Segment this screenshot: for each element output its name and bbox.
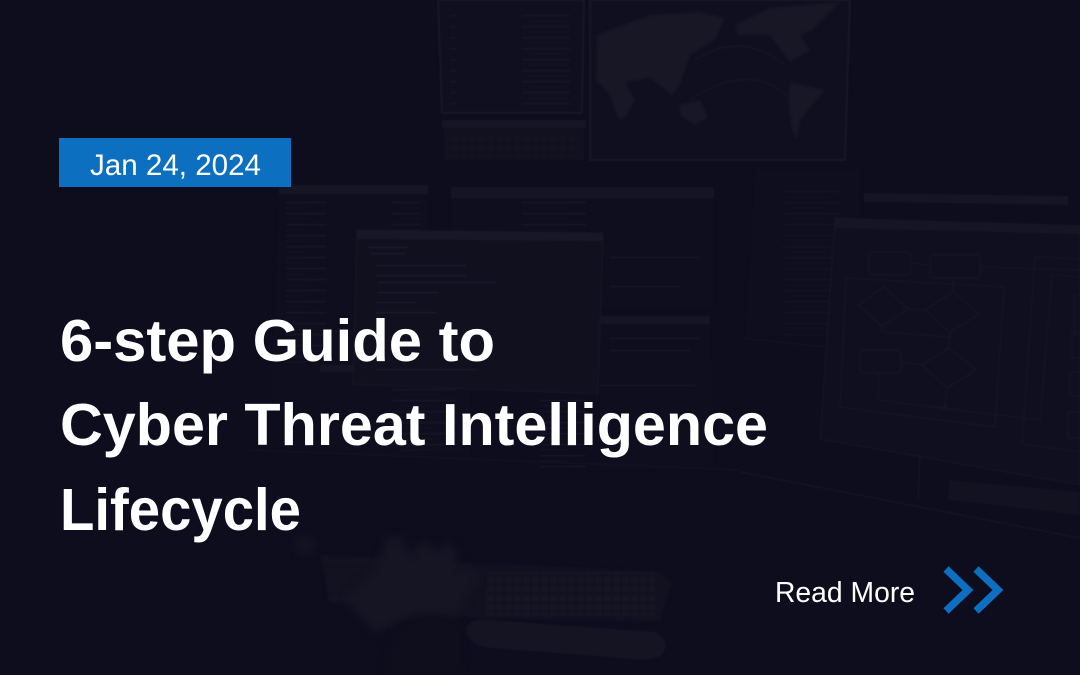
code window centre (451, 187, 714, 308)
front code window (353, 230, 603, 394)
read more link: Read More (775, 577, 915, 609)
map monitor (590, 0, 850, 160)
date badge (59, 138, 291, 187)
flowchart (840, 252, 1080, 427)
flowchart blocks right (1068, 295, 1080, 438)
code window left (271, 185, 428, 400)
bottom right panel (948, 480, 1080, 515)
code window lower left (318, 365, 470, 455)
background photo: dimmed monitors and keyboard (250, 0, 1080, 675)
right code column (742, 170, 860, 347)
hand on keyboard (295, 535, 672, 675)
date text: Jan 24, 2024 (90, 149, 261, 182)
icon: double chevron arrow (946, 569, 998, 611)
read more link (775, 569, 998, 611)
flowchart window (820, 193, 1080, 500)
monitor base edge (740, 472, 1080, 538)
title (60, 308, 768, 543)
top code monitor (438, 0, 586, 160)
title: Cyber Threat Intelligence (60, 392, 768, 458)
code window right lower (540, 316, 715, 470)
title: Lifecycle (60, 477, 301, 543)
title: 6-step Guide to (60, 308, 495, 374)
